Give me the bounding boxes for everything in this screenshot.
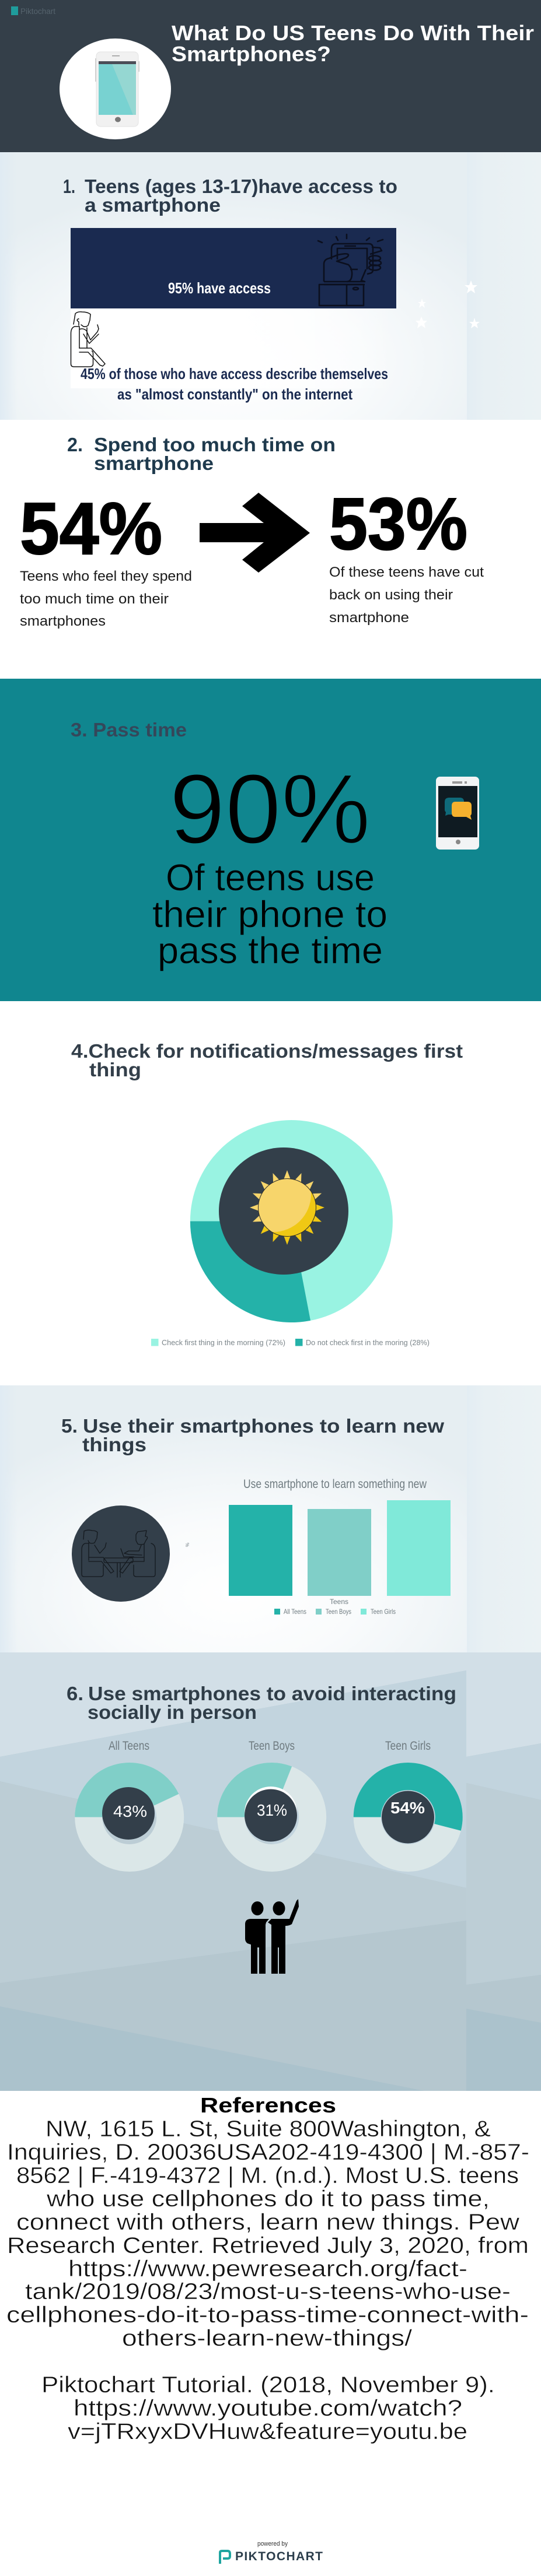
panel: 1 teens have access bbox=[0, 152, 541, 420]
icon: two people at table bbox=[72, 1505, 170, 1602]
title: What Do US Teens Do With Their bbox=[172, 21, 534, 45]
heading: section 2: 2. bbox=[67, 434, 83, 455]
text: citations: Piktochart Tutorial. (2018, November 9). bbox=[41, 2373, 495, 2398]
stat: 53%: back on using their bbox=[329, 587, 453, 603]
bar chart: Teens bbox=[330, 1598, 348, 1606]
stat: 54%: Teens who feel they spend bbox=[20, 568, 192, 584]
footer: powered by Piktochart bbox=[220, 2540, 323, 2564]
heading: section 5: things bbox=[82, 1434, 146, 1455]
heading: section 1: 1. bbox=[63, 176, 75, 197]
donut: teen boys 31% bbox=[231, 1739, 313, 1858]
text: citations: Research Center. Retrieved July 3, 2020, from bbox=[7, 2233, 529, 2258]
axis label: % bbox=[185, 1543, 190, 1547]
donut: teen girls 54%: 54% bbox=[390, 1799, 425, 1817]
heading: section 4 bbox=[71, 1040, 463, 1080]
heading: section 3: 3. Pass time bbox=[71, 719, 187, 740]
icon: phone with chat bubbles bbox=[436, 777, 479, 850]
donut: all teens 43% bbox=[89, 1739, 170, 1858]
logo: Piktochart watermark: Piktochart bbox=[20, 6, 55, 16]
text: citations: others-learn-new-things/ bbox=[122, 2326, 412, 2351]
text: citations bbox=[6, 2117, 529, 2444]
donut: teen boys 31%: Teen Boys bbox=[249, 1739, 295, 1753]
stat box: 95% have access: 95% have access bbox=[168, 279, 271, 297]
stat: 53%: Of these teens have cut bbox=[329, 564, 484, 580]
panel: references bbox=[0, 2091, 541, 2576]
stat box: 95% have access bbox=[71, 228, 396, 308]
legend: Check first thing in the morning (72%) bbox=[162, 1339, 285, 1347]
callout box: 45% almost constantly bbox=[71, 308, 396, 403]
text: citations: https://www.pewresearch.org/fact- bbox=[68, 2256, 467, 2282]
bar chart: Teen Boys bbox=[326, 1608, 351, 1616]
title bbox=[172, 21, 534, 66]
callout box: 45% almost constantly: 45% of those who have access describe themselves bbox=[81, 365, 388, 382]
arrow bbox=[200, 493, 310, 573]
text: citations: connect with others, learn new things. Pew bbox=[16, 2210, 520, 2235]
text: of teens use their phone: pass the time bbox=[158, 929, 383, 971]
callout box: 45% almost constantly: as "almost constantly" on the internet bbox=[117, 385, 352, 403]
heading: section 2: smartphone bbox=[94, 452, 214, 474]
stat: 53% bbox=[329, 483, 484, 626]
icon: hand holding phone bbox=[318, 234, 383, 306]
stat: 53%: smartphone bbox=[329, 610, 409, 626]
donut: teen girls 54% bbox=[367, 1739, 449, 1858]
text: of teens use their phone: their phone to bbox=[152, 893, 388, 935]
heading: section 5: 5. bbox=[61, 1415, 78, 1437]
text: citations: NW, 1615 L. St, Suite 800Washington, & bbox=[46, 2117, 491, 2142]
text: citations: https://www.youtube.com/watch? bbox=[74, 2396, 462, 2421]
bar chart bbox=[229, 1477, 451, 1616]
footer: powered by Piktochart: powered by bbox=[257, 2540, 288, 2547]
stat: 54% bbox=[20, 487, 192, 629]
heading: references: References bbox=[200, 2093, 336, 2117]
donut: teen boys 31%: 31% bbox=[257, 1801, 287, 1819]
stat: 53%: 53% bbox=[329, 483, 467, 565]
text: of teens use their phone: Of teens use bbox=[166, 857, 375, 899]
pie chart bbox=[190, 1120, 393, 1322]
heading: section 6: Use smartphones to avoid interacting bbox=[88, 1683, 456, 1704]
text: citations: Inquiries, D. 20036USA202-419-4300 | M.-857- bbox=[7, 2140, 529, 2165]
text: citations: 8562 | F.-419-4372 | M. (n.d.). Most U.S. teens bbox=[16, 2163, 519, 2188]
panel: 2 too much time bbox=[0, 420, 541, 679]
panel: 4 check notifications bbox=[71, 1044, 463, 1347]
title: Smartphones? bbox=[172, 42, 331, 66]
donut: all teens 43%: 43% bbox=[113, 1802, 147, 1820]
panel: 3 pass time bbox=[0, 679, 541, 1001]
heading: section 1 bbox=[63, 176, 397, 216]
icon: woman seated with phone bbox=[71, 312, 105, 367]
bar chart: Use smartphone to learn something new bbox=[243, 1477, 427, 1491]
text: citations: tank/2019/08/23/most-u-s-teens-who-use- bbox=[25, 2279, 511, 2304]
heading: section 5 bbox=[61, 1415, 444, 1455]
text: citations: cellphones-do-it-to-pass-time-connect-with- bbox=[6, 2303, 529, 2328]
heading: section 6: 6. bbox=[67, 1683, 83, 1704]
panel: header bbox=[0, 0, 541, 152]
legend bbox=[151, 1339, 430, 1347]
panel: 6 avoid interacting bbox=[0, 1652, 541, 2091]
heading: section 6 bbox=[67, 1683, 456, 1723]
legend: Do not check first in the moring (28%) bbox=[306, 1339, 430, 1347]
stat: 54%: 54% bbox=[20, 487, 162, 570]
donut: all teens 43%: All Teens bbox=[109, 1739, 149, 1753]
heading: section 4: 4.Check for notifications/messages first bbox=[71, 1040, 463, 1062]
stat: 90%: 90% bbox=[169, 754, 371, 865]
stat: 54%: too much time on their bbox=[20, 591, 169, 607]
icon: two people standing bbox=[245, 1899, 299, 1974]
stat: 54%: smartphones bbox=[20, 613, 106, 629]
text: of teens use their phone bbox=[152, 857, 388, 971]
heading: section 6: socially in person bbox=[88, 1701, 257, 1723]
icon: sun bbox=[250, 1170, 324, 1245]
text: citations: who use cellphones do it to pass time, bbox=[46, 2187, 490, 2212]
bar chart: Teen Girls bbox=[371, 1608, 396, 1616]
text: citations: v=jTRxyxDVHuw&feature=youtu.be bbox=[68, 2419, 467, 2444]
bar chart: All Teens bbox=[284, 1608, 306, 1616]
decorative: stars bbox=[416, 280, 480, 328]
heading: section 5: Use their smartphones to learn new bbox=[83, 1415, 444, 1437]
heading: section 2 bbox=[67, 434, 336, 474]
heading: section 4: thing bbox=[89, 1059, 141, 1080]
footer: powered by Piktochart: PIKTOCHART bbox=[235, 2550, 323, 2563]
heading: section 1: a smartphone bbox=[85, 194, 221, 216]
heading: section 2: Spend too much time on bbox=[94, 434, 336, 455]
icon: smartphone in white circle bbox=[60, 38, 171, 139]
donut: teen girls 54%: Teen Girls bbox=[385, 1739, 431, 1753]
heading: section 1: Teens (ages 13-17)have access to bbox=[85, 176, 397, 197]
panel: 5 learn new things bbox=[0, 1385, 541, 1652]
